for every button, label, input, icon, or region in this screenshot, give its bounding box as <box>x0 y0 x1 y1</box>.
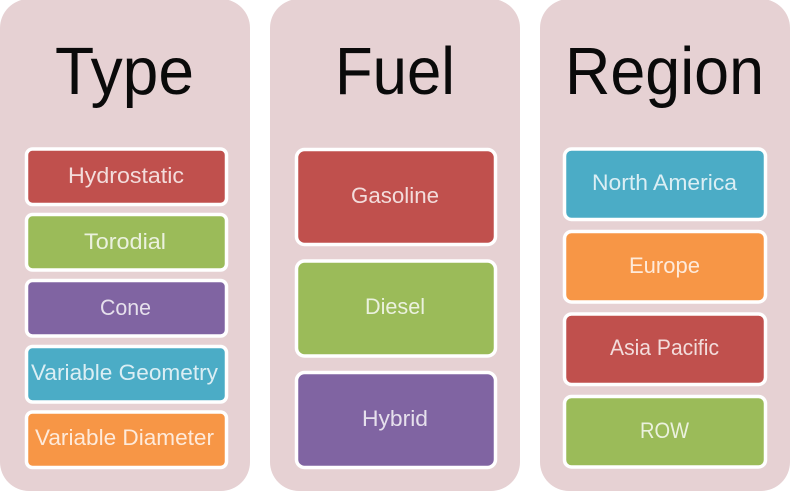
heading: Type: Type <box>55 34 194 109</box>
item: North America: North America <box>592 170 738 195</box>
item: Variable Diameter: Variable Diameter <box>35 425 214 450</box>
item: North America <box>564 149 766 220</box>
item: Gasoline: Gasoline <box>351 183 439 208</box>
item: Hydrostatic: Hydrostatic <box>68 163 184 188</box>
item: Variable Diameter <box>26 412 226 468</box>
item: ROW <box>564 396 766 467</box>
heading: Fuel: Fuel <box>335 34 455 109</box>
item: Torodial <box>26 214 226 270</box>
panel: Fuel <box>270 0 520 491</box>
item: Hybrid <box>296 372 496 468</box>
heading: Region: Region <box>565 34 764 109</box>
item: Cone <box>26 280 226 336</box>
panel: Region <box>540 0 790 491</box>
item: Hydrostatic <box>26 149 226 204</box>
item: Gasoline <box>296 150 496 244</box>
item: Diesel <box>296 261 496 356</box>
item: ROW: ROW <box>640 418 689 443</box>
item: Torodial: Torodial <box>84 229 166 254</box>
item: Variable Geometry: Variable Geometry <box>31 360 218 385</box>
item: Cone: Cone <box>100 295 151 320</box>
item: Europe <box>564 232 766 302</box>
item: Hybrid: Hybrid <box>362 406 428 431</box>
item: Variable Geometry <box>26 346 226 402</box>
item: Asia Pacific: Asia Pacific <box>610 335 719 360</box>
item: Asia Pacific <box>564 314 766 384</box>
item: Europe: Europe <box>629 253 700 278</box>
panel: Type <box>0 0 250 491</box>
item: Diesel: Diesel <box>365 294 425 319</box>
